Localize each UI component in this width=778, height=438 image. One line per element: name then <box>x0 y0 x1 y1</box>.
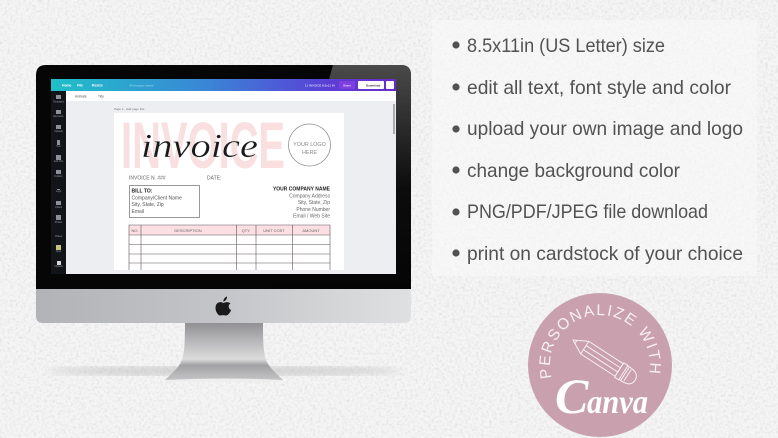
sidebar: Text <box>56 145 61 148</box>
icon: pencil <box>568 333 640 387</box>
top toolbar: Download <box>366 84 380 88</box>
invoice table: DESCRIPTION <box>174 228 202 233</box>
invoice table: AMOUNT <box>302 228 320 233</box>
canva script wordmark <box>555 368 648 424</box>
bill to box: BILL TO: <box>132 188 153 194</box>
top toolbar: Resize <box>92 84 103 88</box>
feature: upload: upload your own image and logo <box>467 118 743 140</box>
logo circle: HERE <box>302 150 317 156</box>
top toolbar: 11 INVOICE 8.5x11 IN <box>305 84 335 88</box>
invoice number: INVOICE N. ### <box>129 176 166 182</box>
invoice table: NO. <box>131 228 139 233</box>
company details <box>273 186 331 220</box>
sidebar <box>51 91 66 274</box>
feature list <box>452 35 743 265</box>
canva badge <box>528 293 672 437</box>
sidebar: Videos <box>55 235 63 238</box>
screen <box>51 79 396 274</box>
feature: download: PNG/PDF/JPEG file download <box>467 201 708 223</box>
monitor <box>36 65 411 382</box>
stand shadow <box>46 367 402 375</box>
invoice table: QTY. <box>242 228 250 233</box>
top toolbar <box>51 79 396 91</box>
invoice watermark: INVOICE <box>121 108 285 182</box>
sidebar: Add-Ons <box>54 160 64 163</box>
sidebar: Apps <box>56 250 62 253</box>
top toolbar: Share <box>343 84 351 88</box>
company details: Phone Number <box>296 207 330 213</box>
secondary toolbar <box>66 91 396 101</box>
monitor chin <box>36 285 411 323</box>
sidebar: Folders <box>55 175 63 178</box>
invoice number: DATE: <box>207 176 221 182</box>
company details: Sity, State, Zip <box>298 200 330 206</box>
top toolbar: All changes saved <box>129 84 154 88</box>
bill to box: Email <box>132 209 144 215</box>
text panel backdrop <box>432 20 757 276</box>
feature: edit text: edit all text, font style and color <box>467 77 731 99</box>
logo circle: YOUR LOGO <box>293 142 326 148</box>
curved heading: PERSONALIZE WITH <box>539 304 661 378</box>
secondary toolbar: Tidy <box>98 94 104 98</box>
page label: Page 1 - Add page title <box>114 107 145 111</box>
monitor bezel <box>36 65 411 289</box>
bezel gloss <box>270 65 411 289</box>
sidebar: Charts <box>55 206 63 209</box>
bill to box: Sity, State, Zip <box>132 202 164 208</box>
top toolbar: File <box>77 84 83 88</box>
canva script wordmark: C <box>555 368 589 424</box>
sidebar: Photos <box>55 221 63 224</box>
sidebar: Logo <box>56 190 62 193</box>
canva script wordmark: anva <box>587 384 648 421</box>
feature: background: change background color <box>467 160 680 182</box>
company details: Company Address <box>289 194 330 200</box>
invoice script title: invoice <box>141 128 258 165</box>
bill to box <box>130 186 200 218</box>
invoice table <box>129 225 330 270</box>
invoice page <box>114 108 344 270</box>
sidebar: Templates <box>53 100 65 104</box>
invoice table: UNIT COST <box>263 228 285 233</box>
logo circle <box>288 124 330 166</box>
bill to box: Company/Client Name <box>132 196 182 202</box>
invoice number <box>129 176 221 182</box>
feature: size: 8.5x11in (US Letter) size <box>467 35 665 57</box>
secondary toolbar: Animate <box>75 94 87 98</box>
sidebar: Elements <box>54 115 64 118</box>
sidebar: Uploads <box>54 130 64 133</box>
stand <box>165 322 283 382</box>
scrollbar <box>393 104 395 134</box>
icon: apple logo <box>216 296 231 316</box>
sidebar: Uploads <box>54 265 64 268</box>
company details: Email / Web Site <box>293 214 330 220</box>
feature: print: print on cardstock of your choice <box>467 243 743 265</box>
company details: YOUR COMPANY NAME <box>273 186 331 192</box>
top toolbar: Home <box>62 84 72 88</box>
